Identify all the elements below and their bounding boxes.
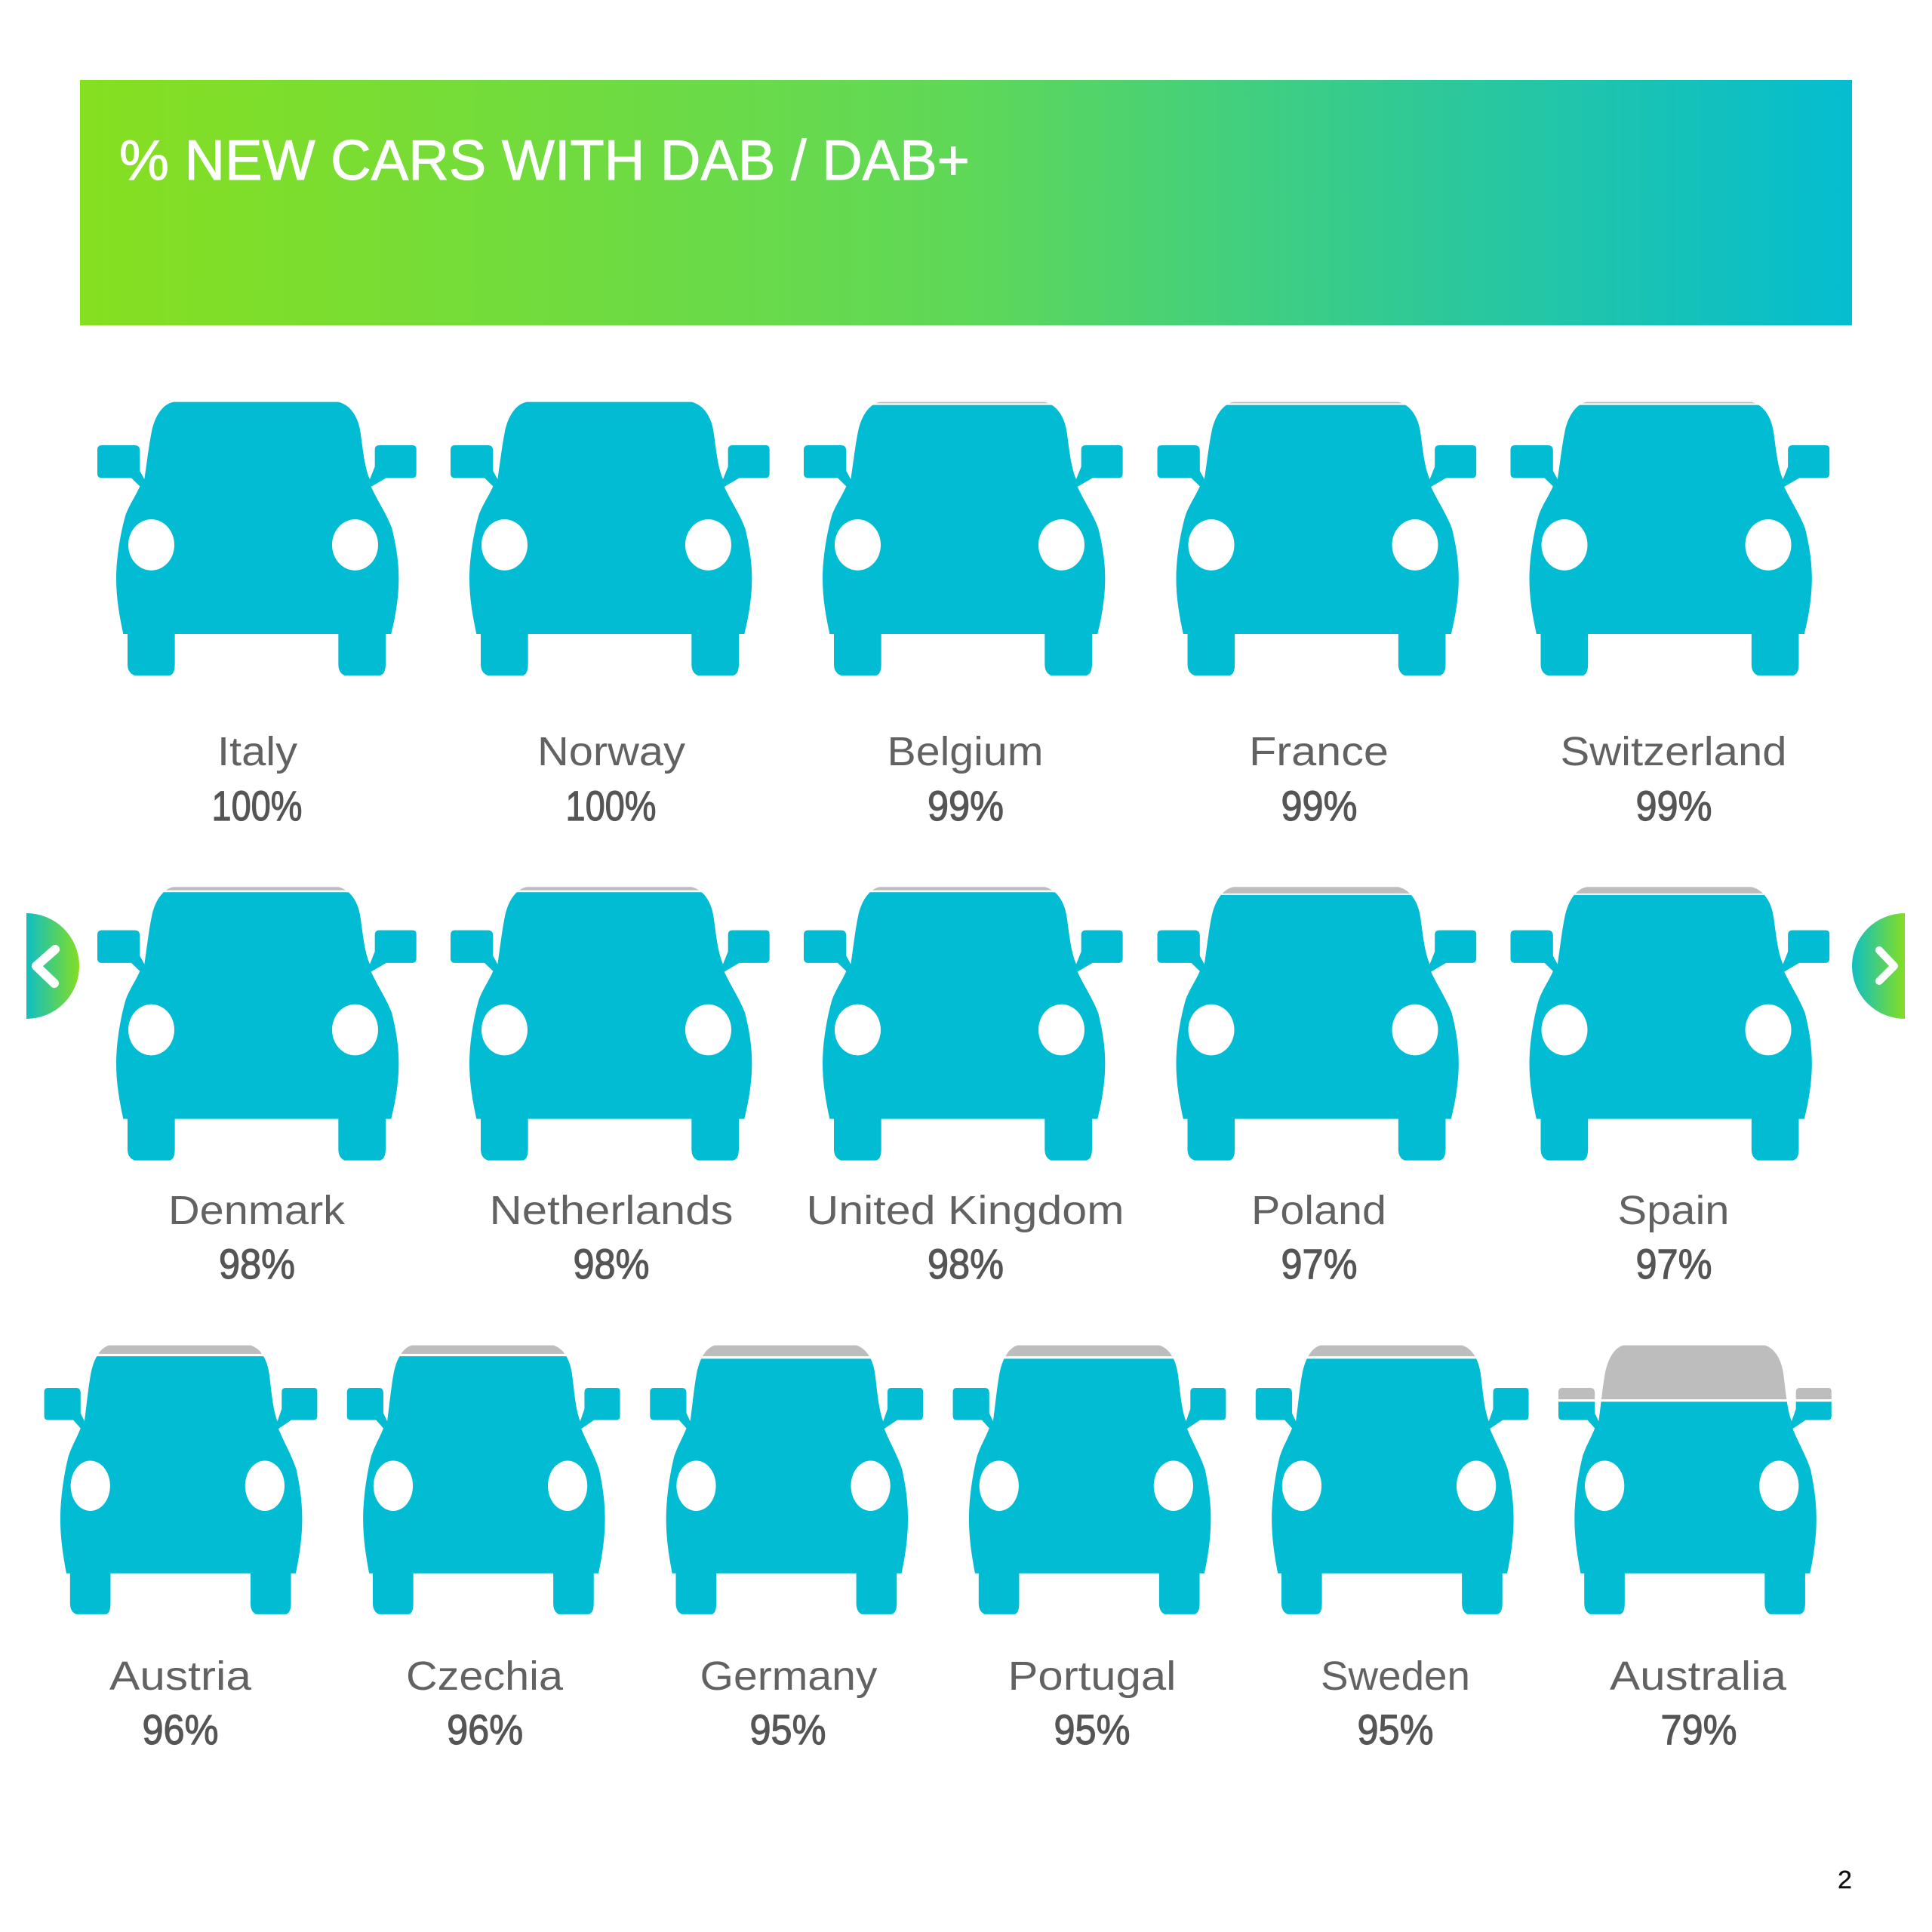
icon: car 79% (1558, 1346, 1832, 1614)
icon: car 95% (650, 1346, 923, 1614)
value: 99%: 99% (1636, 782, 1712, 829)
panel: Sweden (1256, 1346, 1529, 1753)
value: 98%: 98% (219, 1240, 295, 1287)
label: Portugal: Portugal (1008, 1654, 1176, 1699)
value: 96%: 96% (447, 1706, 523, 1753)
panel: Spain (1510, 887, 1829, 1287)
icon: car 96% (347, 1346, 620, 1614)
panel: France (1157, 402, 1476, 829)
label: Norway: Norway (537, 729, 685, 774)
panel: Austria (45, 1346, 317, 1753)
value: 95%: 95% (1357, 1706, 1434, 1753)
icon: car 99% (1157, 402, 1476, 675)
value: 99%: 99% (1281, 782, 1357, 829)
label: Switzerland: Switzerland (1561, 729, 1787, 774)
label: Germany: Germany (700, 1654, 877, 1699)
panel: United Kingdom (804, 887, 1124, 1287)
panel: Italy (97, 402, 417, 829)
value: 100%: 100% (211, 782, 302, 829)
label: Sweden: Sweden (1321, 1654, 1470, 1699)
label: Netherlands: Netherlands (489, 1188, 734, 1233)
value: 95%: 95% (750, 1706, 826, 1753)
panel: Belgium (804, 402, 1123, 829)
value: 79%: 79% (1660, 1706, 1737, 1753)
icon: car 98% (97, 887, 417, 1161)
value: 99%: 99% (928, 782, 1004, 829)
icon: car 99% (1510, 402, 1829, 675)
value: 98%: 98% (928, 1240, 1004, 1287)
title banner (80, 80, 1852, 325)
icon: car 100% (451, 402, 770, 675)
label: Austria: Austria (109, 1654, 252, 1699)
label: Denmark: Denmark (168, 1188, 346, 1233)
label: Spain: Spain (1618, 1188, 1730, 1233)
panel: Portugal (953, 1346, 1226, 1753)
icon: car 98% (804, 887, 1123, 1161)
heading: % NEW CARS WITH DAB / DAB+ (119, 128, 970, 192)
icon: car 96% (45, 1346, 317, 1614)
panel: Switzerland (1510, 402, 1829, 829)
value: 100%: 100% (566, 782, 657, 829)
panel: Czechia (347, 1346, 620, 1753)
left arrow tab (26, 913, 79, 1019)
value: 96%: 96% (142, 1706, 219, 1753)
icon: car 100% (97, 402, 417, 675)
panel: Netherlands (451, 887, 770, 1287)
panel: Australia (1558, 1346, 1832, 1753)
panel: Germany (650, 1346, 923, 1753)
icon: car 95% (1256, 1346, 1529, 1614)
label: Australia: Australia (1610, 1654, 1787, 1699)
right arrow tab (1852, 913, 1905, 1019)
value: 97%: 97% (1281, 1240, 1357, 1287)
value: 95%: 95% (1054, 1706, 1131, 1753)
label: United Kingdom: United Kingdom (806, 1188, 1124, 1233)
icon: car 99% (804, 402, 1123, 675)
value: 98%: 98% (574, 1240, 649, 1287)
panel: Denmark (97, 887, 417, 1287)
label: Italy: Italy (217, 729, 297, 774)
icon: car 97% (1157, 887, 1476, 1161)
page number: 2 (1838, 1866, 1852, 1894)
icon: car 95% (953, 1346, 1226, 1614)
label: Belgium: Belgium (888, 729, 1043, 774)
label: France: France (1249, 729, 1389, 774)
icon: car 98% (451, 887, 770, 1161)
label: Czechia: Czechia (406, 1654, 564, 1699)
icon: car 97% (1510, 887, 1829, 1161)
panel: Poland (1157, 887, 1476, 1287)
panel: Norway (451, 402, 770, 829)
label: Poland: Poland (1251, 1188, 1386, 1233)
value: 97%: 97% (1636, 1240, 1712, 1287)
